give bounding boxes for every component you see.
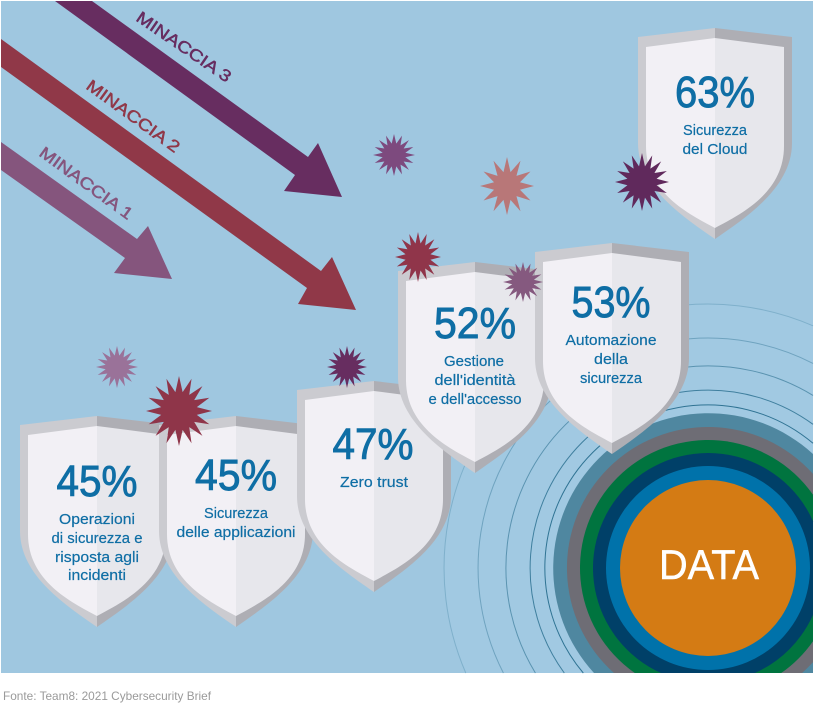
shield: 52% gestione identita: Gestione (444, 353, 504, 370)
data target with rings (444, 304, 813, 673)
source note: Fonte: Team8: 2021 Cybersecurity Brief (3, 689, 212, 703)
shield: 45% applicazioni: Sicurezza (204, 505, 269, 522)
shield: 45% operazioni: 45% (56, 457, 138, 506)
shield: 45% operazioni: risposta agli (55, 549, 139, 566)
shield: 45% operazioni: Operazioni (59, 511, 135, 528)
shield: 53% automazione: Automazione (566, 332, 656, 349)
shield: 45% applicazioni: delle applicazioni (176, 524, 296, 541)
shield: 45% operazioni: di sicurezza e (52, 530, 142, 547)
label: minaccia 1: MINACCIA 1 (36, 144, 136, 223)
icon: burst light mauve (96, 346, 138, 388)
shield: 52% gestione identita: 52% (434, 299, 516, 348)
shield: 47% zero trust: 47% (332, 420, 414, 469)
shield: 47% zero trust: Zero trust (340, 474, 409, 491)
shield: 45% applicazioni: 45% (195, 451, 277, 500)
icon: burst dark purple at cloud shield (615, 153, 669, 211)
shield: 45% operazioni: incidenti (68, 567, 126, 584)
arrow: minaccia 1 (1, 142, 172, 279)
icon: burst purple near arrows (373, 134, 415, 176)
shield: 52% gestione identita: e dell'accesso (428, 391, 522, 408)
shield: 53% automazione (535, 243, 689, 454)
label: minaccia 2: MINACCIA 2 (83, 77, 183, 156)
shield: 53% automazione: 53% (572, 278, 650, 327)
arrow: minaccia 3 (55, 1, 342, 197)
shield: 53% automazione: sicurezza (580, 370, 643, 387)
shield: 63% sicurezza del cloud (638, 28, 792, 239)
shield: 63% sicurezza del cloud: del Cloud (682, 141, 748, 158)
icon: burst mauve between shields (503, 262, 543, 302)
arrow: minaccia 2 (1, 39, 356, 310)
shield: 52% gestione identita: dell'identità (434, 372, 516, 389)
shield: 47% zero trust (297, 381, 451, 592)
shield: 45% operazioni (20, 416, 174, 627)
icon: burst large red (146, 376, 212, 446)
shield: 52% gestione identita (398, 262, 552, 473)
icon: burst dark purple at zero trust (327, 346, 367, 388)
shield: 63% sicurezza del cloud: Sicurezza (683, 122, 748, 139)
data target with rings: DATA (659, 541, 759, 588)
shield: 45% applicazioni (159, 416, 313, 627)
icon: burst salmon (480, 157, 534, 215)
label: minaccia 3: MINACCIA 3 (133, 8, 234, 86)
shield: 53% automazione: della (594, 351, 629, 368)
icon: burst red at identity shield (395, 232, 441, 282)
shield: 63% sicurezza del cloud: 63% (675, 68, 755, 117)
